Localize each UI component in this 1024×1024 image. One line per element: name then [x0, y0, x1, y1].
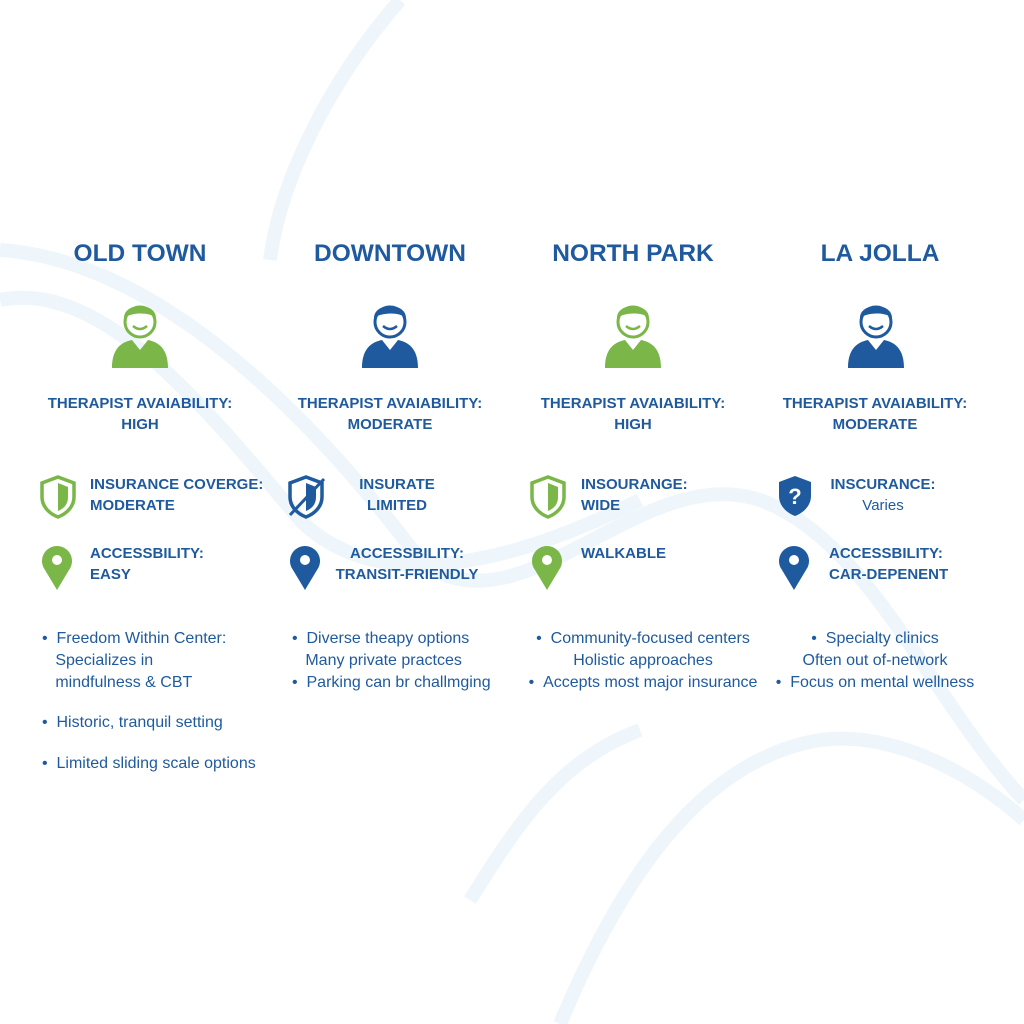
icon: shield: [40, 475, 76, 519]
insurance: INSURATE: [359, 476, 435, 493]
therapist availability: HIGH: [614, 416, 652, 433]
accessibility: ACCESSBILITY:: [350, 545, 464, 562]
therapist availability: THERAPIST AVAIABILITY:: [48, 395, 232, 412]
insurance: LIMITED: [367, 497, 427, 514]
icon: person green: [112, 306, 168, 368]
bullets: [776, 630, 974, 691]
icon: shield question: [779, 476, 811, 516]
accessibility: ACCESSBILITY:: [90, 545, 204, 562]
accessibility: EASY: [90, 566, 131, 583]
insurance: [581, 476, 688, 514]
bullets: • Community-focused centers: [536, 630, 750, 647]
bullets: • Focus on mental wellness: [776, 674, 974, 691]
therapist availability: HIGH: [121, 416, 159, 433]
icon: person blue: [362, 306, 418, 368]
column: Downtown: [288, 240, 491, 691]
title: DOWNTOWN: [314, 240, 466, 267]
insurance: Varies: [862, 497, 904, 514]
bullets: • Specialty clinics: [811, 630, 939, 647]
column: Old Town: [40, 240, 263, 772]
column: North Park: [529, 240, 757, 691]
bullets: Specializes in: [55, 652, 153, 669]
accessibility: WALKABLE: [581, 545, 666, 562]
column: La Jolla: [776, 240, 974, 691]
accessibility: CAR-DEPENENT: [829, 566, 948, 583]
therapist availability: THERAPIST AVAIABILITY:: [783, 395, 967, 412]
insurance: INSURANCE COVERGE:: [90, 476, 263, 493]
therapist availability: MODERATE: [348, 416, 432, 433]
bullets: • Freedom Within Center:: [42, 630, 226, 647]
insurance: WIDE: [581, 497, 620, 514]
icon: pin: [290, 546, 320, 590]
icon: shield slash: [288, 475, 325, 519]
therapist availability: [782, 395, 967, 433]
title: LA JOLLA: [821, 240, 939, 267]
therapist availability: [298, 395, 482, 433]
icon: person green: [605, 306, 661, 368]
insurance: INSCURANCE:: [830, 476, 936, 493]
bullets: [529, 630, 757, 691]
insurance: [830, 476, 936, 514]
bullets: mindfulness & CBT • Historic, tranquil setting • Limited sliding scale options: [42, 674, 256, 772]
title: NORTH PARK: [552, 240, 714, 267]
therapist availability: MODERATE: [833, 416, 917, 433]
insurance: INSOURANGE:: [581, 476, 688, 493]
icon: shield: [530, 475, 566, 519]
accessibility: ACCESSBILITY:: [829, 545, 943, 562]
accessibility: [336, 545, 478, 583]
insurance: [90, 476, 263, 514]
icon: shield question: ?: [788, 484, 802, 509]
therapist availability: THERAPIST AVAIABILITY:: [541, 395, 725, 412]
accessibility: [90, 545, 204, 583]
bullets: • Parking can br challmging: [292, 674, 491, 691]
therapist availability: THERAPIST AVAIABILITY:: [298, 395, 482, 412]
icon: pin: [532, 546, 562, 590]
bullets: [292, 630, 491, 691]
icon: person blue: [848, 306, 904, 368]
accessibility: TRANSIT-FRIENDLY: [336, 566, 478, 583]
therapist availability: [540, 395, 725, 433]
icon: pin: [779, 546, 809, 590]
bullets: Holistic approaches: [573, 652, 713, 669]
accessibility: [829, 545, 948, 583]
insurance: [359, 476, 435, 514]
bullets: Many private practces: [305, 652, 462, 669]
icon: pin: [42, 546, 72, 590]
bullets: [42, 630, 256, 772]
bullets: • Diverse theapy options: [292, 630, 469, 647]
therapist availability: [48, 395, 232, 433]
bullets: • Accepts most major insurance: [529, 674, 757, 691]
bullets: Often out of-network: [803, 652, 947, 669]
insurance: MODERATE: [90, 497, 175, 514]
title: OLD TOWN: [74, 240, 206, 267]
